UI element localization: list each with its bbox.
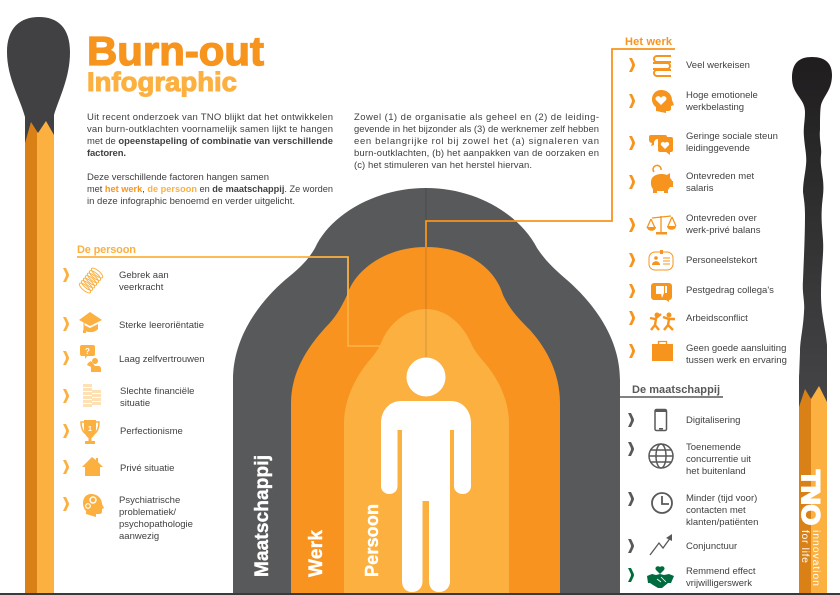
intro text right column: gevende in het bijzonder als (3) de werknemer zelf hebben (354, 124, 599, 135)
item: personeelstekort: Personeelstekort (686, 255, 758, 266)
item: ontevreden over werk-privé balans (629, 213, 761, 236)
person figure (381, 358, 471, 592)
item: perfectionisme (63, 420, 183, 444)
item: minder contacten: Minder (tijd voor) (686, 493, 757, 504)
intro text right column: (c) het stimuleren van het herstel hiervan. (354, 160, 532, 171)
item: toenemende concurrentie: het buitenland (686, 466, 746, 477)
intro text left column: Deze verschillende factoren hangen samen (87, 172, 269, 183)
item: laag zelfvertrouwen: Laag zelfvertrouwen (119, 354, 205, 365)
connector: de persoon (77, 257, 380, 346)
intro text left column: van burn-outklachten voornamelijk samen lijkt te hangen (87, 124, 333, 135)
item: privé situatie (63, 457, 174, 476)
item: veel werkeisen (629, 56, 750, 76)
item: pestgedrag collega's (629, 283, 774, 302)
item: gebrek aan veerkracht: veerkracht (119, 282, 164, 293)
item: arbeidsconflict (629, 311, 748, 330)
panel: de persoon (63, 244, 205, 542)
item: psychiatrische problematiek: psychopathologie (119, 519, 193, 530)
item: laag zelfvertrouwen (63, 345, 205, 372)
item: remmend effect vrijwilligerswerk (628, 566, 756, 589)
item: slechte financiële situatie (63, 384, 194, 409)
title: Infographic (87, 67, 237, 97)
intro text right column: Zowel (1) de organisatie als geheel en (2) de leiding- (354, 112, 599, 123)
item: psychiatrische problematiek (63, 494, 193, 542)
TNO logo (796, 470, 824, 586)
title: Burn-out (87, 28, 264, 74)
intro text right column: een belangrijke rol bij zowel het (a) signaleren van (354, 136, 599, 147)
item: psychiatrische problematiek: problematiek/ (119, 507, 176, 518)
panel: het werk (625, 36, 787, 366)
title (87, 28, 264, 97)
item: hoge emotionele werkbelasting: werkbelasting (685, 102, 744, 113)
item: gebrek aan veerkracht: Gebrek aan (119, 270, 169, 281)
item: ontevreden met salaris: salaris (686, 183, 714, 194)
item: perfectionisme: 1 (88, 426, 92, 433)
intro text left column: factoren. (87, 148, 126, 159)
item: ontevreden met salaris (629, 165, 754, 194)
item: veel werkeisen: Veel werkeisen (686, 60, 750, 71)
item: geen goede aansluiting (629, 342, 787, 366)
item: laag zelfvertrouwen: ? (85, 347, 90, 356)
item: geen goede aansluiting: Geen goede aansluiting (686, 343, 786, 354)
intro text left column: Uit recent onderzoek van TNO blijkt dat het ontwikkelen (87, 112, 333, 123)
heading: de maatschappij: De maatschappij (632, 384, 720, 396)
item: ontevreden met salaris: Ontevreden met (686, 171, 754, 182)
TNO logo: innovation (810, 530, 822, 586)
item: digitalisering: Digitalisering (686, 415, 740, 426)
TNO logo: TNO (796, 470, 824, 525)
right matchstick (792, 57, 832, 593)
heading: de persoon: De persoon (77, 244, 136, 256)
item: gebrek aan veerkracht (63, 267, 169, 294)
item: arbeidsconflict: Arbeidsconflict (686, 313, 748, 324)
item: conjunctuur: Conjunctuur (686, 541, 737, 552)
item: toenemende concurrentie: Toenemende (686, 442, 741, 453)
concentric layers diagram (233, 188, 620, 593)
item: psychiatrische problematiek: Psychiatrische (119, 495, 180, 506)
item: minder contacten: contacten met (686, 505, 746, 516)
layer: maatschappij (233, 188, 620, 593)
label: Maatschappij: Maatschappij (252, 455, 273, 577)
layer: persoon (344, 309, 509, 593)
bottom edge bar (0, 593, 840, 595)
item: geringe sociale steun: leidinggevende (686, 143, 750, 154)
item: conjunctuur (628, 534, 737, 555)
item: hoge emotionele werkbelasting: Hoge emotionele (686, 90, 758, 101)
item: remmend effect vrijwilligerswerk: vrijwilligerswerk (686, 578, 752, 589)
item: hoge emotionele werkbelasting (629, 90, 758, 113)
item: remmend effect vrijwilligerswerk: Remmend effect (686, 566, 756, 577)
item: slechte financiële situatie: Slechte financiële (120, 386, 194, 397)
intro text left column: in deze infographic benoemd en verder uitgelicht. (87, 196, 295, 207)
item: geringe sociale steun: Geringe sociale steun (686, 131, 778, 142)
TNO logo: for life (799, 530, 811, 563)
item: sterke leeroriëntatie (63, 312, 204, 333)
item: slechte financiële situatie: situatie (120, 398, 150, 409)
item: minder contacten: klanten/patiënten (686, 517, 758, 528)
heading: het werk: Het werk (625, 36, 673, 48)
item: toenemende concurrentie: concurrentie uit (686, 454, 751, 465)
item: toenemende concurrentie (628, 442, 751, 477)
panel: de maatschappij (620, 384, 758, 589)
label: Werk: Werk (306, 530, 327, 577)
item: digitalisering (628, 410, 740, 430)
item: geen goede aansluiting: tussen werk en ervaring (686, 355, 787, 366)
item: psychiatrische problematiek: aanwezig (119, 531, 159, 542)
intro text right column: burn-outklachten, (b) het aanpakken van de oorzaken en (354, 148, 599, 159)
intro text right column (354, 112, 599, 171)
intro text left column: met de opeenstapeling of combinatie van verschillende (87, 136, 333, 147)
item: sterke leeroriëntatie: Sterke leeroriëntatie (119, 320, 204, 331)
intro text left column: met het werk, de persoon en de maatschappij. Ze worden (87, 184, 333, 195)
item: minder contacten (628, 492, 758, 528)
item: geringe sociale steun (629, 131, 778, 155)
item: ontevreden over werk-privé balans: werk-privé balans (685, 225, 761, 236)
left matchstick (7, 17, 70, 593)
label: Persoon: Persoon (362, 504, 382, 577)
item: perfectionisme: Perfectionisme (120, 426, 183, 437)
item: ontevreden over werk-privé balans: Ontevreden over (686, 213, 757, 224)
connector: het werk (426, 49, 675, 247)
item: pestgedrag collega's: Pestgedrag collega's (686, 285, 774, 296)
layer: werk (291, 247, 560, 593)
item: privé situatie: Privé situatie (120, 463, 174, 474)
intro text left column (87, 112, 333, 207)
item: personeelstekort (629, 250, 758, 270)
